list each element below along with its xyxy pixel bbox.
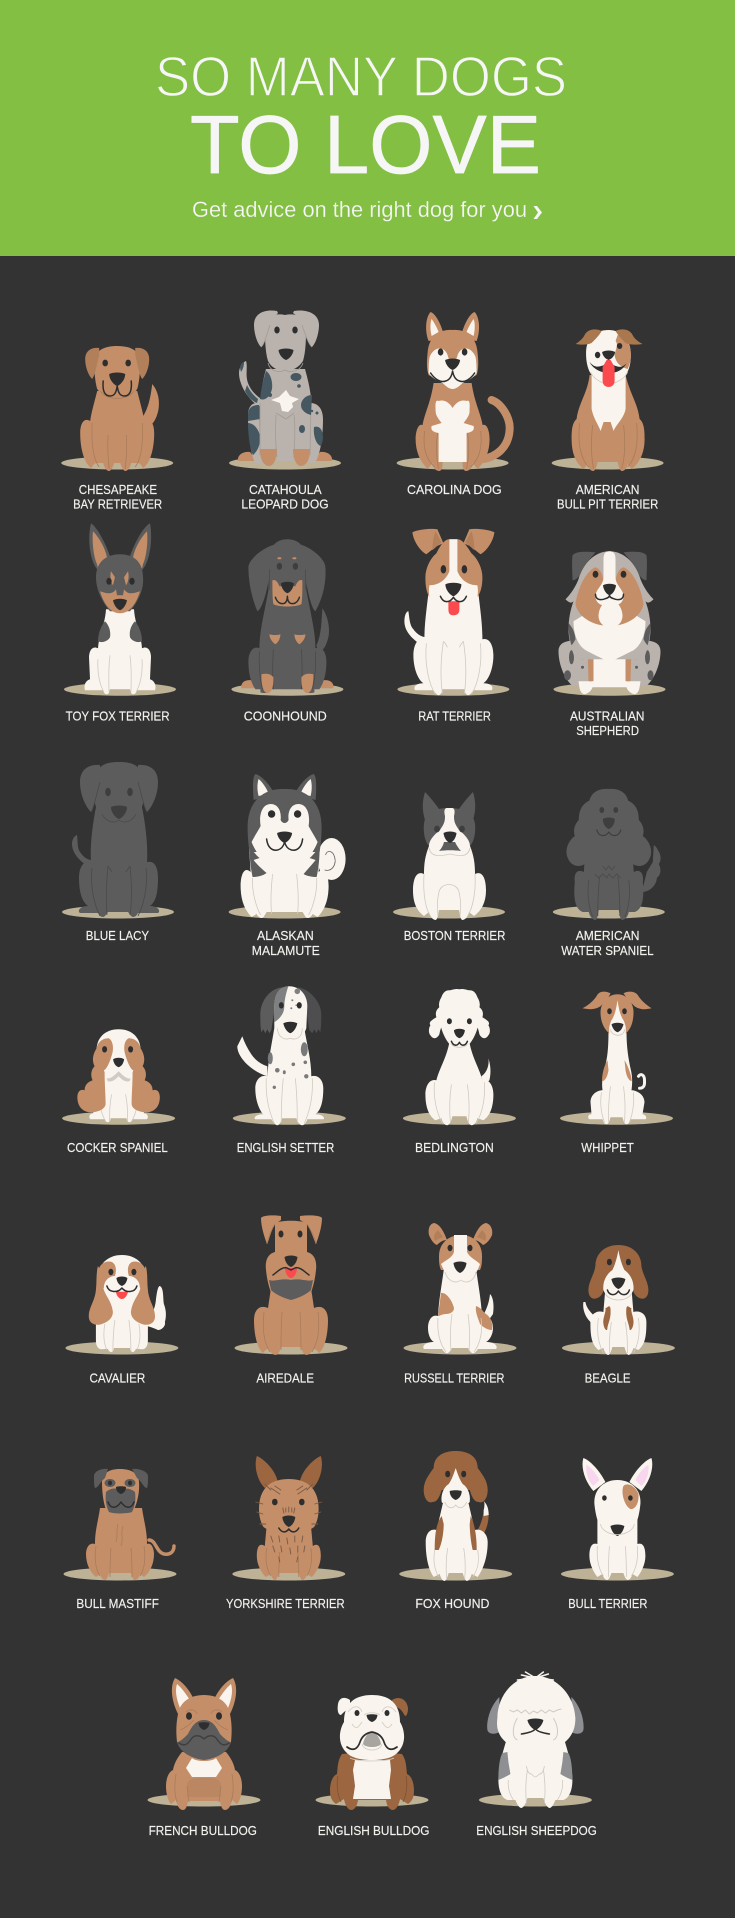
label [252,929,320,958]
dog card: French Bulldog [148,1678,260,1838]
dog illustration [423,1223,497,1353]
dog card: Bedlington [403,989,516,1155]
chevron icon [534,206,542,219]
label: YORKSHIRE TERRIER [226,1597,345,1611]
label: CHESAPEAKE [79,483,157,497]
dog card: Beagle [562,1245,675,1386]
dog card: Yorkshire Terrier [226,1456,345,1611]
ground shadow [562,1342,675,1354]
dog card: Boston Terrier [393,792,505,943]
ground shadow [148,1794,260,1806]
label: RAT TERRIER [418,710,491,724]
ground shadow [61,456,173,470]
label: CAROLINA DOG [407,483,502,497]
ground shadow [403,1112,516,1125]
label: ENGLISH BULLDOG [318,1824,430,1838]
ground shadow [479,1794,592,1806]
ground shadow [316,1794,428,1806]
ground shadow [552,456,664,470]
dog illustration [86,1469,174,1580]
label: ENGLISH SHEEPDOG [476,1824,597,1838]
subtitle link: Get advice on the right dog for you [192,197,527,222]
label: AMERICAN [576,929,640,943]
dog illustration [330,1695,414,1810]
dog card: Cocker Spaniel [62,1029,175,1155]
dog card: Alaskan Malamute [229,774,346,958]
ground shadow [64,1568,176,1580]
dog card: Catahoula Leopard Dog [229,311,341,512]
dog illustration [77,1029,160,1122]
label: BULL MASTIFF [76,1597,159,1611]
label: CATAHOULA [249,483,322,497]
ground shadow [62,1112,175,1125]
label: BLUE LACY [86,929,150,943]
header banner [0,0,735,256]
label [557,483,658,512]
ground shadow [560,1112,673,1125]
label: TOY FOX TERRIER [66,710,170,724]
label: BEDLINGTON [415,1141,494,1155]
label: BULL PIT TERRIER [557,498,658,512]
ground shadow [233,1112,346,1125]
label: CAVALIER [90,1372,145,1386]
label: BEAGLE [585,1372,631,1386]
dog card: English Setter [233,986,346,1155]
dog illustration [572,329,645,471]
dog card: Chesapeake Bay Retriever [61,346,173,512]
dog illustration [416,312,510,471]
label: BAY RETRIEVER [73,498,162,512]
dog illustration [241,539,334,693]
dog illustration [89,1255,166,1352]
dog card: Toy Fox Terrier [64,523,176,724]
label: COCKER SPANIEL [67,1141,168,1155]
dog illustration [80,346,159,471]
ground shadow [393,906,505,918]
dog card: English Sheepdog [476,1672,597,1838]
dog card: American Bull Pit Terrier [552,329,664,512]
ground shadow [554,683,666,696]
dog card: Russell Terrier [404,1223,516,1386]
dog card: Airedale [234,1215,348,1386]
label [570,710,644,738]
dog card: Fox Hound [399,1451,512,1611]
label [73,483,162,512]
dog illustration [424,1451,489,1581]
dog card: Bull Terrier [561,1458,674,1611]
ground shadow [553,906,665,918]
label: BULL TERRIER [568,1597,647,1611]
banner background [0,0,735,256]
label: COONHOUND [244,710,327,724]
dog illustration [582,992,652,1124]
dog illustration [72,762,159,917]
dog illustration [413,792,486,920]
ground shadow [229,456,341,470]
ground shadow [62,906,174,918]
ground shadow [399,1568,512,1580]
dog illustration [558,551,660,694]
dog illustration [238,311,332,466]
label: ENGLISH SETTER [237,1141,334,1155]
label: AMERICAN [576,483,640,497]
label: MALAMUTE [252,944,320,958]
dog illustration [254,1215,328,1355]
dog illustration [85,523,155,694]
label: ALASKAN [257,929,314,943]
label: SHEPHERD [576,724,639,738]
dog illustration [583,1458,652,1580]
ground shadow [397,456,509,470]
dog illustration [404,529,494,695]
dog illustration [583,1245,648,1355]
dog illustration [241,774,346,918]
ground shadow [65,1342,178,1354]
ground shadow [64,683,176,696]
label: FOX HOUND [415,1597,489,1611]
title line 2: TO LOVE [190,98,541,191]
label [561,929,654,958]
dog card: Whippet [560,992,673,1155]
dog card: Bull Mastiff [64,1469,176,1611]
dog card: Cavalier [65,1255,178,1386]
dog card: Blue Lacy [62,762,174,943]
label: FRENCH BULLDOG [149,1824,257,1838]
dog card: Australian Shepherd [554,551,666,738]
dog card: Coonhound [231,539,343,724]
ground shadow [561,1568,674,1580]
ground shadow [232,1568,345,1580]
label: LEOPARD DOG [241,498,329,512]
ground shadow [231,683,343,696]
dog illustration [256,1456,322,1580]
label: BOSTON TERRIER [404,929,505,943]
dog illustration [487,1672,584,1808]
dog illustration [237,986,324,1125]
label: WATER SPANIEL [561,944,654,958]
label: WHIPPET [581,1141,634,1155]
dog illustration [566,789,661,920]
ground shadow [234,1342,348,1354]
dog card: Carolina Dog [397,312,510,497]
label: AUSTRALIAN [570,710,644,724]
dog illustration [425,989,493,1125]
dog card: English Bulldog [316,1695,430,1838]
dog illustration [166,1678,242,1810]
dog card: Rat Terrier [397,529,509,724]
dog card: American Water Spaniel [553,789,665,958]
label [241,483,329,512]
label: RUSSELL TERRIER [404,1372,504,1386]
ground shadow [404,1342,516,1354]
label: AIREDALE [256,1372,314,1386]
title line 1: SO MANY DOGS [155,45,567,109]
ground shadow [229,906,341,918]
ground shadow [397,683,509,696]
